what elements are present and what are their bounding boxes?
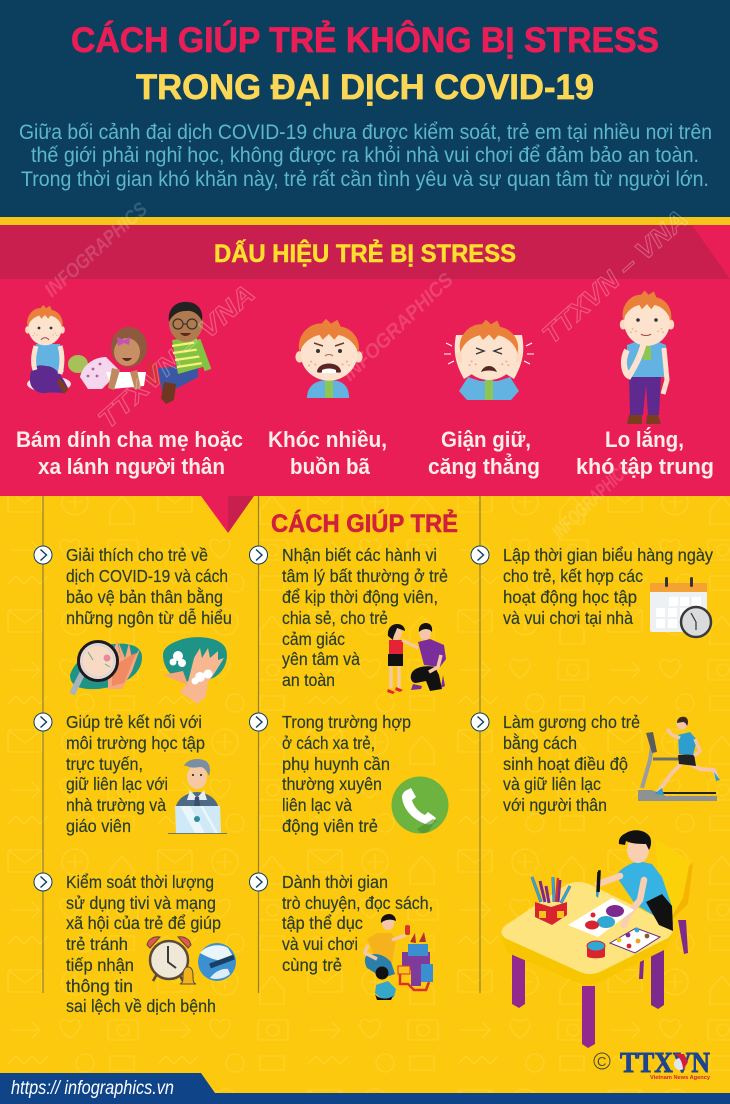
label: crying: buồn bã	[290, 454, 371, 479]
watermarks: TTXVN – VNA	[92, 278, 261, 434]
icon: internet globe	[198, 943, 236, 981]
tip 6: Làm gương cho trẻ	[503, 712, 640, 732]
icon: phone	[392, 776, 448, 834]
tip 3: hoạt động học tập	[503, 587, 637, 607]
pencil pot	[532, 877, 570, 925]
watermarks	[41, 198, 693, 544]
tip 4: giáo viên	[66, 816, 131, 836]
tip 7: sai lệch về dịch bệnh	[66, 996, 216, 1016]
label: anxious	[576, 427, 714, 479]
tip 7: sử dụng tivi và mạng	[66, 893, 216, 913]
logo: TTXVN copyright: Vietnam News Agency	[650, 1075, 711, 1081]
tip 6	[471, 712, 720, 815]
tip 6: và giữ liên lạc	[503, 774, 601, 794]
tip 2: Nhận biết các hành vi	[282, 545, 437, 565]
icon: worried standing child	[620, 291, 674, 424]
watermarks: INFOGRAPHICS	[41, 198, 152, 302]
tip 2: tâm lý bất thường ở trẻ	[282, 566, 448, 586]
tip 5: Trong trường hợp	[282, 712, 411, 732]
tip 5	[250, 712, 448, 836]
logo: TTXVN copyright	[594, 1047, 711, 1081]
chair	[639, 840, 693, 979]
table legs	[512, 949, 664, 1048]
label: angry: Giận giữ,	[441, 427, 531, 452]
tip 1	[34, 545, 232, 704]
tip 2: an toàn	[282, 670, 335, 690]
tip 6: sinh hoạt điều độ	[503, 754, 628, 774]
tip 5: động viên trẻ	[282, 816, 378, 836]
footer url: https:// infographics.vn	[11, 1077, 174, 1099]
tip 2: chia sẻ, cho trẻ	[282, 608, 388, 628]
tip 8: và vui chơi	[282, 934, 358, 954]
panel: how to help	[0, 496, 730, 1096]
tip 1: bảo vệ bản thân bằng	[66, 586, 223, 607]
tip 2	[250, 545, 448, 694]
icon: alarm clock	[147, 937, 196, 984]
label: clinging	[16, 427, 243, 479]
paint cup	[587, 941, 605, 958]
tip 8	[250, 872, 433, 1000]
label: anxious: Lo lắng,	[605, 427, 684, 452]
tip 4: môi trường học tập	[66, 733, 205, 753]
label: clinging: Bám dính cha mẹ hoặc	[16, 427, 243, 452]
icon: angry child covering ears	[444, 320, 534, 400]
tip 8: trò chuyện, đọc sách,	[282, 893, 433, 913]
label: clinging: xa lánh người thân	[38, 454, 225, 479]
tip 1: Giải thích cho trẻ về	[66, 545, 208, 565]
icon: runner on treadmill	[638, 717, 720, 801]
logo: TTXVN copyright: C	[597, 1054, 606, 1069]
icon: crying child	[295, 319, 363, 398]
tip 3: cho trẻ, kết hợp các	[503, 566, 643, 586]
watermarks: INFOGRAPHICS	[548, 458, 636, 544]
icon: washing hands	[163, 637, 227, 704]
signs labels	[16, 427, 714, 479]
tip 7: tiếp nhận	[66, 955, 134, 975]
label: angry	[428, 427, 540, 479]
paint palette	[610, 928, 660, 953]
header panel	[0, 0, 730, 217]
tip 7: Kiểm soát thời lượng	[66, 872, 214, 892]
paper with paint	[568, 898, 634, 937]
tip 3: Lập thời gian biểu hàng ngày	[503, 545, 713, 565]
tip 4: giữ liên lạc với	[66, 774, 168, 794]
table top	[502, 882, 673, 985]
intro paragraph: thế giới phải nghỉ học, không được ra khỏi nhà vui chơi để đảm bảo an toàn.	[31, 144, 699, 167]
tip 4: trực tuyến,	[66, 754, 143, 774]
tip 3	[471, 545, 713, 637]
tip 8: tập thể dục	[282, 913, 363, 933]
tip 7: trẻ tránh	[66, 934, 128, 954]
tip 4	[34, 712, 227, 836]
illustration: child painting at a table	[502, 830, 693, 1048]
tip 2: cảm giác	[282, 629, 345, 649]
tip 8: Dành thời gian	[282, 872, 388, 892]
tip 3: và vui chơi tại nhà	[503, 608, 633, 628]
footer bar	[0, 1073, 730, 1104]
tip 5: phụ huynh cần	[282, 754, 390, 774]
tip 4: nhà trường và	[66, 795, 166, 815]
tip 8: cùng trẻ	[282, 955, 342, 975]
tip 5: ở cách xa trẻ,	[282, 733, 375, 753]
tip 4: Giúp trẻ kết nối với	[66, 712, 202, 732]
signs heading: DẤU HIỆU TRẺ BỊ STRESS	[214, 238, 516, 268]
tip 5: liên lạc và	[282, 795, 352, 815]
arrow: pointer from signs panel	[201, 496, 254, 533]
watermarks: INFOGRAPHICS	[338, 269, 458, 386]
icon: calendar and clock	[650, 577, 711, 637]
watermarks: TTXVN – VNA	[536, 203, 693, 349]
tip 2: yên tâm và	[282, 649, 360, 669]
tip 6: bằng cách	[503, 732, 577, 753]
tip 7: thông tin	[66, 976, 133, 996]
tip 5: thường xuyên	[282, 774, 382, 794]
title line 1: CÁCH GIÚP TRẺ KHÔNG BỊ STRESS	[71, 20, 659, 60]
label: anxious: khó tập trung	[576, 454, 714, 479]
intro paragraph	[19, 121, 712, 191]
title line 2: TRONG ĐẠI DỊCH COVID-19	[136, 68, 594, 107]
tip 7	[34, 872, 236, 1016]
icon: adult comforting child	[387, 623, 446, 694]
tip 6: với người thân	[503, 795, 607, 815]
label: crying	[268, 427, 387, 479]
tip 7: xã hội của trẻ để giúp	[66, 913, 221, 933]
icon: teacher with laptop	[168, 759, 227, 834]
label: crying: Khóc nhiều,	[268, 427, 387, 452]
child painter	[596, 830, 673, 931]
panel: signs of stress	[0, 225, 730, 496]
icon: parent and child playing with blocks	[365, 914, 433, 1000]
tip 1: những ngôn từ dễ hiểu	[66, 607, 232, 628]
label: angry: căng thẳng	[428, 454, 540, 479]
tip 1: dịch COVID-19 và cách	[66, 566, 228, 586]
icon: magnifier over hand	[70, 640, 142, 694]
tip 2: để kịp thời động viên,	[282, 587, 438, 607]
icon: clingy child and playing children	[25, 302, 208, 404]
help heading: CÁCH GIÚP TRẺ	[271, 508, 458, 538]
logo: TTXVN copyright: TTXVN	[620, 1047, 710, 1079]
